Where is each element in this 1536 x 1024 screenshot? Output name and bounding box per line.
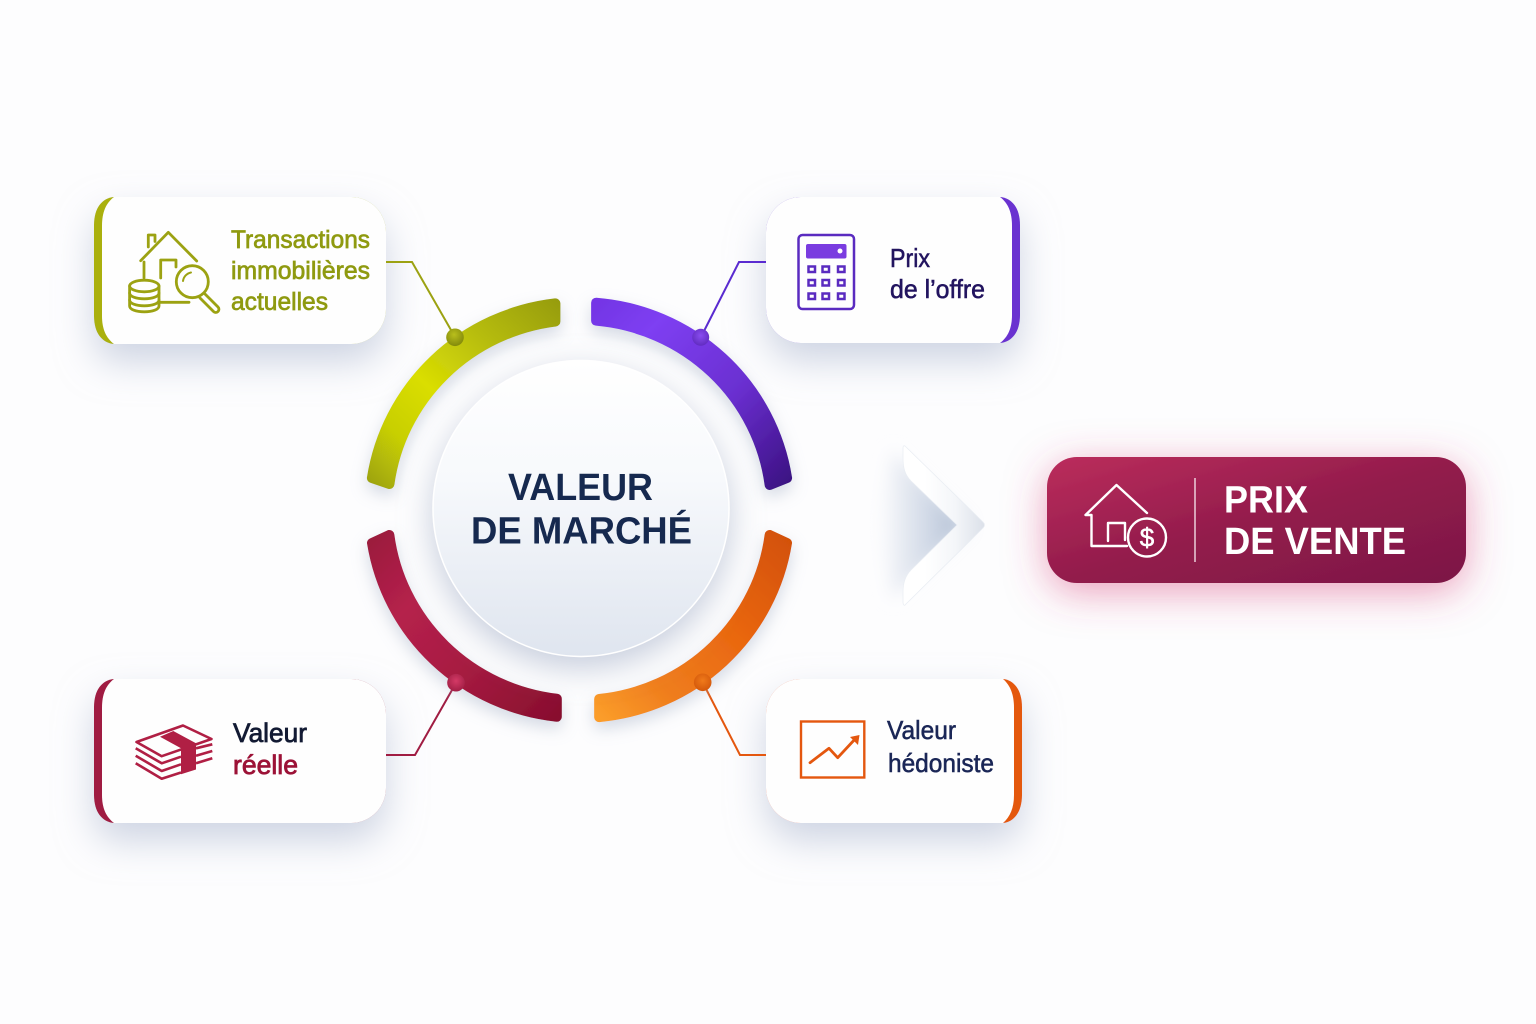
text: valeur réelle bbox=[233, 718, 307, 780]
text: transactions immobilières actuelles: Transactions bbox=[231, 226, 370, 254]
text: prix de l'offre: de l’offre bbox=[890, 274, 985, 304]
ring segment: purple bbox=[596, 303, 787, 485]
text: prix de l'offre: Prix bbox=[890, 243, 930, 273]
panel: prix de vente bbox=[1047, 457, 1466, 583]
heading: valeur de marché: VALEUR bbox=[508, 467, 653, 509]
text: prix de vente: PRIX bbox=[1224, 480, 1309, 522]
text: valeur réelle: Valeur bbox=[233, 718, 307, 748]
ring segment: olive bbox=[372, 303, 555, 484]
text: prix de vente: DE VENTE bbox=[1224, 521, 1406, 563]
text: valeur réelle: réelle bbox=[233, 750, 298, 780]
panel: prix de l'offre bbox=[766, 197, 1020, 343]
icon: house with dollar coin: $ bbox=[1140, 522, 1155, 552]
text: valeur hédoniste: hédoniste bbox=[888, 748, 994, 778]
text: valeur hédoniste bbox=[887, 715, 994, 778]
text: transactions immobilières actuelles: immobilières bbox=[231, 257, 370, 285]
heading: valeur de marché: DE MARCHÉ bbox=[471, 508, 692, 552]
divider bbox=[1194, 478, 1196, 562]
icon: calculator bbox=[798, 235, 854, 309]
text: prix de vente bbox=[1224, 480, 1406, 563]
connector: olive bbox=[386, 262, 455, 337]
panel: valeur hédoniste bbox=[766, 679, 1022, 823]
connector: purple bbox=[701, 262, 766, 337]
heading: valeur de marché bbox=[471, 467, 692, 552]
dot: red bbox=[447, 674, 465, 692]
dot: olive bbox=[446, 328, 464, 346]
center circle bbox=[433, 360, 729, 656]
text: valeur hédoniste: Valeur bbox=[887, 715, 956, 745]
connector: orange bbox=[703, 683, 766, 755]
panel: valeur réelle bbox=[94, 679, 386, 823]
text: prix de l'offre bbox=[890, 243, 985, 304]
icon: house, coins and magnifier bbox=[130, 232, 219, 312]
connector: red bbox=[386, 683, 456, 755]
icon: stack of banknotes bbox=[136, 726, 212, 779]
icon: house with dollar coin bbox=[1086, 485, 1166, 556]
icon: rising chart bbox=[801, 722, 864, 778]
dot: purple bbox=[692, 329, 709, 346]
ring segment: orange bbox=[599, 535, 787, 717]
arrow: chevron bbox=[876, 446, 984, 605]
ring segment: red bbox=[372, 535, 557, 717]
text: transactions immobilières actuelles: actuelles bbox=[231, 288, 328, 316]
dot: orange bbox=[694, 674, 712, 691]
text: transactions immobilières actuelles bbox=[231, 226, 370, 316]
panel: transactions immobilières actuelles bbox=[94, 197, 386, 344]
